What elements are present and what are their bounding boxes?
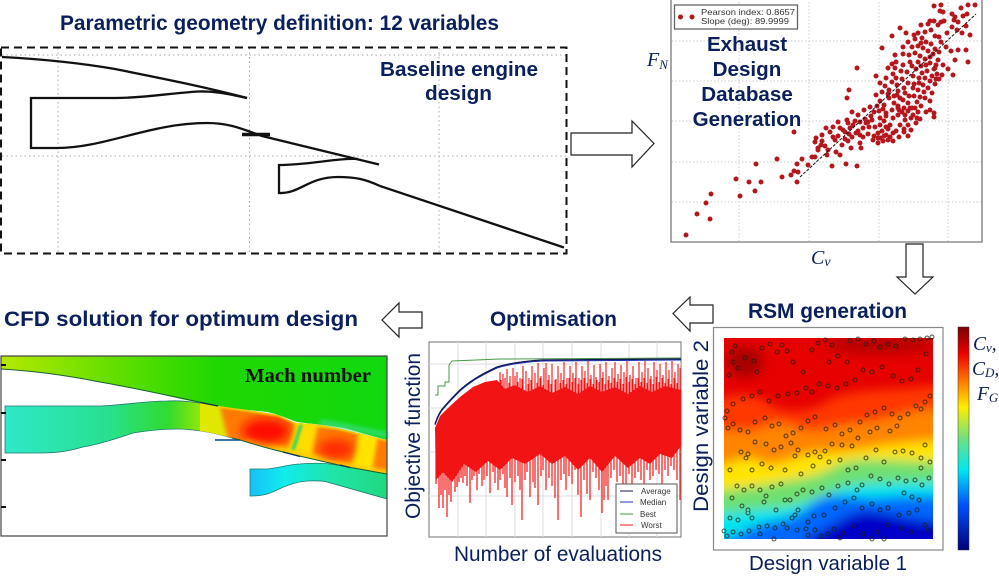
supersonic jet xyxy=(200,403,386,474)
arrow: RSM to optimisation xyxy=(673,297,713,331)
colour bar labels: C xyxy=(973,334,986,355)
heading: exhaust design database generation: Design xyxy=(713,58,781,81)
title: parametric geometry: Parametric geometry definition: 12 variables xyxy=(60,12,499,35)
best series xyxy=(435,358,681,395)
cool shear layer above the jet xyxy=(320,422,387,435)
panel: scatter plot database xyxy=(646,0,982,270)
median series xyxy=(435,360,681,425)
panel: optimisation convergence chart xyxy=(402,342,681,566)
scatter points xyxy=(686,5,975,235)
legend: Slope (deg): 89.9999 xyxy=(701,16,789,26)
y axis label: objective function: Objective function xyxy=(402,353,425,519)
jet wall xyxy=(1,369,387,474)
legend xyxy=(616,484,677,533)
y axis label FN: N xyxy=(658,57,669,72)
legend xyxy=(674,5,798,29)
colour bar labels: D xyxy=(984,365,995,380)
panel: RSM response surface xyxy=(690,327,999,575)
label: baseline engine design: design xyxy=(425,82,492,105)
secondary duct outline xyxy=(279,159,564,248)
worst series: spikes xyxy=(436,440,680,520)
label: baseline engine design xyxy=(380,58,538,105)
heat map xyxy=(724,338,933,539)
external flow band xyxy=(1,356,387,440)
y axis label: design variable 2: Design variable 2 xyxy=(690,340,713,512)
heading: exhaust design database generation: Exhaust xyxy=(707,33,787,56)
primary duct outline xyxy=(31,91,379,164)
y axis label FN: F xyxy=(647,49,659,71)
trend line xyxy=(800,14,976,177)
colour bar xyxy=(958,327,969,550)
heading: optimisation: Optimisation xyxy=(490,308,617,331)
panel: CFD Mach number contour xyxy=(1,356,395,536)
legend: Pearson index: 0.8657 xyxy=(701,7,795,17)
colour bar labels: , xyxy=(992,334,997,355)
wall highlights xyxy=(200,402,350,468)
x axis label Cv: v xyxy=(824,255,831,270)
x axis label: design variable 1: Design variable 1 xyxy=(749,552,907,575)
legend: Average xyxy=(641,487,671,496)
engine outer nacelle line xyxy=(2,57,247,98)
legend: Worst xyxy=(641,521,663,530)
average series xyxy=(435,359,681,424)
label: baseline engine design: Baseline engine xyxy=(380,58,538,81)
primary duct xyxy=(5,401,232,453)
frame xyxy=(1,356,387,536)
heading: exhaust design database generation xyxy=(693,33,801,131)
arrow: database to RSM xyxy=(897,244,933,294)
worst series: solid body xyxy=(435,380,681,482)
colour bar labels: C xyxy=(972,359,985,380)
duct lip xyxy=(215,439,240,441)
legend: Median xyxy=(640,498,666,507)
heading: RSM generation: RSM generation xyxy=(748,300,907,323)
x axis label: number of evaluations: Number of evaluations xyxy=(454,543,662,566)
colour bar labels: F xyxy=(977,384,989,405)
label: Mach number: Mach number xyxy=(245,365,371,387)
sample points xyxy=(724,337,932,539)
axis ticks xyxy=(1,365,6,507)
colour bar labels: v xyxy=(986,340,992,355)
secondary duct xyxy=(250,463,387,499)
colour bar labels xyxy=(972,334,999,405)
colour bar labels: G xyxy=(989,390,999,405)
arrow: geometry to database xyxy=(571,121,654,167)
splitter lip xyxy=(242,133,270,136)
x axis label Cv: C xyxy=(811,247,824,269)
heading: CFD solution: CFD solution for optimum design xyxy=(4,308,358,331)
heading: exhaust design database generation: Generation xyxy=(693,108,801,131)
arrow: optimisation to CFD xyxy=(382,303,422,337)
legend: Best xyxy=(640,510,657,519)
panel: baseline engine geometry xyxy=(1,48,566,254)
dashed frame xyxy=(1,48,566,254)
heading: exhaust design database generation: Database xyxy=(701,83,793,106)
